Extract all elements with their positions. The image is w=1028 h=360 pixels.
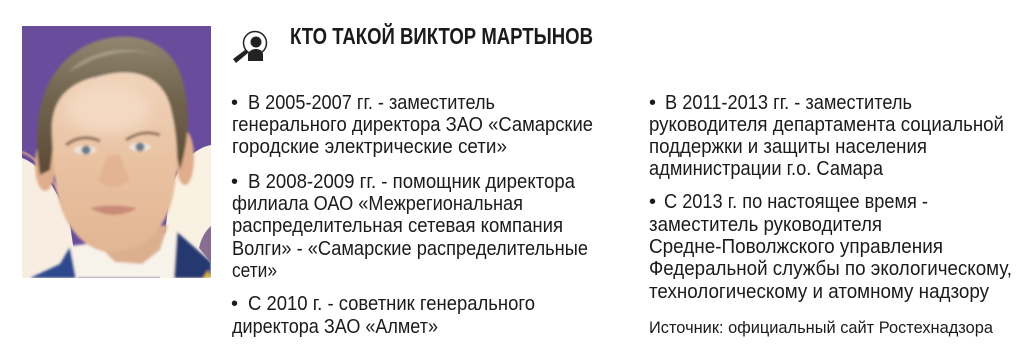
item: 2008-2009: В 2008-2009 гг. - помощник директора bbox=[248, 171, 576, 193]
item: 2013: Средне-Поволжского управления bbox=[649, 236, 943, 258]
item: 2013: Федеральной службы по экологическому, bbox=[649, 258, 1012, 280]
ears bbox=[35, 139, 55, 191]
photo: portrait of Viktor Martynov bbox=[22, 26, 211, 278]
item: 2008-2009: Волги» - «Самарские распределительные bbox=[232, 238, 588, 260]
item: 2011-2013: руководителя департамента социальной bbox=[649, 114, 1004, 136]
item: 2011-2013: В 2011-2013 гг. - заместитель bbox=[665, 92, 912, 114]
hair bbox=[37, 36, 188, 175]
source note: Источник: официальный сайт Ростехнадзора bbox=[649, 318, 994, 337]
item: 2005-2007: • bbox=[231, 92, 238, 114]
item: 2010: С 2010 г. - советник генерального bbox=[248, 293, 535, 315]
item: 2008-2009: распределительная сетевая компания bbox=[232, 215, 563, 237]
text column: left career items bbox=[231, 92, 593, 338]
item: 2008-2009: филиала ОАО «Межрегиональная bbox=[232, 193, 523, 215]
item: 2008-2009: сети» bbox=[232, 260, 277, 282]
item: 2013: • bbox=[649, 191, 656, 213]
item: 2005-2007 bbox=[231, 92, 593, 158]
item: 2013: С 2013 г. по настоящее время - bbox=[664, 191, 928, 213]
item: 2005-2007: городские электрические сети» bbox=[232, 136, 507, 158]
item: 2013: технологическому и атомному надзору bbox=[649, 281, 989, 303]
eyebrows bbox=[66, 138, 100, 145]
icon: magnifier over person bbox=[233, 32, 266, 63]
item: 2005-2007: генерального директора ЗАО «Самарские bbox=[232, 114, 593, 136]
eyes bbox=[74, 146, 96, 154]
item: 2013: заместитель руководителя bbox=[649, 214, 882, 236]
item: 2011-2013: поддержки и защиты населения bbox=[649, 136, 927, 158]
item: 2013 bbox=[649, 191, 1012, 303]
item: 2008-2009 bbox=[231, 171, 588, 282]
neck and collar bbox=[70, 232, 180, 278]
item: 2010: директора ЗАО «Алмет» bbox=[232, 316, 438, 338]
face bbox=[52, 72, 177, 252]
item: 2011-2013: • bbox=[649, 92, 656, 114]
nose bbox=[98, 155, 130, 187]
mouth bbox=[90, 206, 137, 215]
item: 2011-2013 bbox=[649, 92, 1004, 180]
item: 2010 bbox=[231, 293, 535, 338]
item: 2011-2013: администрации г.о. Самара bbox=[649, 158, 884, 180]
item: 2005-2007: В 2005-2007 гг. - заместитель bbox=[248, 92, 495, 114]
title: КТО ТАКОЙ ВИКТОР МАРТЫНОВ bbox=[290, 22, 593, 49]
item: 2008-2009: • bbox=[231, 171, 238, 193]
text column: right career items bbox=[649, 92, 1012, 337]
item: 2010: • bbox=[231, 293, 238, 315]
